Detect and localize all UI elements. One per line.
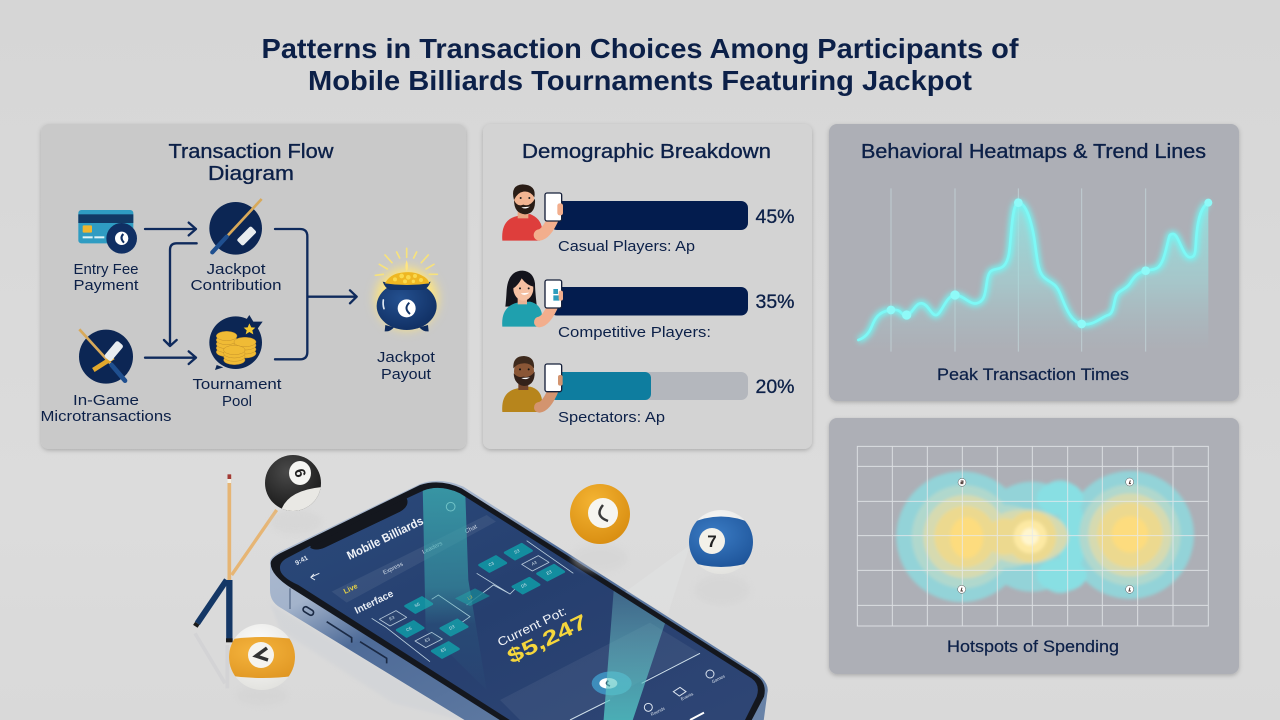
label: jackpot contribution [190,262,282,294]
icon: in-game microtransactions cue [79,329,133,384]
phone body [270,481,768,720]
phone reflection [270,603,473,720]
icon: tournament pool coins [209,315,263,370]
bottom controls: Games [711,674,726,684]
status and header text [294,502,479,617]
label: jackpot payout: Jackpot [377,350,435,366]
status and header text: Express [382,562,404,576]
illustration: black eight-style ball: 6 [290,467,309,479]
illustration: striped orange ball [229,624,295,690]
illustration: blue seven ball [689,510,753,574]
label: in-game microtransactions: Microtransactions [40,409,172,425]
illustration: blue seven ball: 7 [707,532,717,551]
heatmap: hotspots of spending [857,446,1208,626]
camera notch [310,498,407,549]
status and header text: Interface [353,588,396,617]
arrow: entry fee to jackpot contribution [145,223,196,235]
side buttons [302,606,387,663]
label: jackpot contribution: Jackpot [206,262,266,278]
bar: spectators 20%: 20% [756,377,795,398]
tournament brackets: A3 [531,559,538,567]
panel: hotspots of spending heatmap [829,418,1239,674]
label: entry fee payment: Entry Fee [74,262,138,278]
heading: behavioral heatmaps and trend lines: Behavioral Heatmaps & Trend Lines [861,141,1206,163]
icon: casual player with phone [502,184,563,241]
tournament brackets: E3 [424,636,431,643]
tournament brackets: D3 [448,624,456,631]
bar: spectators 20% [550,372,795,426]
bottom controls [500,623,726,720]
tournament brackets: D5 [520,582,528,589]
illustration: orange ball [570,484,630,572]
label: tournament pool: Pool [222,394,252,410]
beam glass above phone [625,545,690,614]
label: in-game microtransactions: In-Game [73,393,139,409]
heading: transaction flow: Diagram [208,163,294,185]
label: tournament pool: Tournament [192,377,282,393]
icon: pot of gold [375,248,437,331]
icon: jackpot contribution cue [209,199,262,255]
phone screen [280,488,758,720]
arrow: microtransactions to pool [145,351,196,364]
tournament brackets: C3 [488,560,495,568]
bar: casual players 45% [550,201,795,255]
current pot amount: Current Pot: [495,604,569,649]
illustration: cue sticks [195,474,277,688]
bar: spectators 20%: Spectators: Ap [558,409,665,426]
tournament brackets [372,541,573,662]
title [262,33,1019,96]
tournament brackets: S5 [414,601,421,608]
heading: transaction flow [168,141,334,185]
current pot amount: $5,247 [504,610,591,668]
panel: transaction flow diagram [40,124,466,449]
icon: spectator with phone [502,356,563,412]
label: jackpot payout [377,350,435,383]
bar: competitive players 35% [550,287,795,341]
tournament brackets: E3 [388,614,396,622]
label: jackpot contribution: Contribution [190,278,282,294]
tournament brackets: C5 [405,625,413,633]
label: tournament pool [192,377,282,410]
label: entry fee payment [74,262,138,294]
title: Mobile Billiards Tournaments Featuring Jackpot [308,65,972,96]
line chart: peak transaction times [858,188,1212,352]
bottom controls: Rounds [650,706,666,717]
caption: peak transaction times: Peak Transaction Times [937,365,1129,384]
status and header text: Leaders [422,541,444,556]
tournament brackets: E3 [546,569,553,576]
arrow: contribution down to pool [164,243,197,346]
status and header text: Live [342,581,359,596]
phone bezel [271,482,765,720]
bottom controls: Events [680,691,694,702]
title: Patterns in Transaction Choices Among Participants of [262,33,1019,64]
bar: competitive players 35%: 35% [756,292,795,313]
bar: casual players 45%: 45% [756,207,795,228]
panel: demographic breakdown [483,124,812,449]
illustration: black eight-style ball [265,455,321,524]
light beam right [603,587,668,720]
heading: demographic breakdown: Demographic Breakdown [522,141,771,163]
caption: hotspots of spending: Hotspots of Spending [947,637,1119,656]
status and header text: Mobile Billiards [345,513,426,563]
current pot amount [498,608,583,662]
icon: competitive player with phone [502,271,563,327]
icon: credit card with coin [78,210,137,254]
bar: casual players 45%: Casual Players: Ap [558,238,695,255]
tournament brackets: S3 [513,548,521,555]
label: in-game microtransactions [40,393,172,425]
tournament brackets: L3 [467,594,474,601]
status and header text: Chat [464,524,479,535]
heading: transaction flow: Transaction Flow [168,141,334,163]
bar: competitive players 35%: Competitive Players: [558,324,711,341]
illustration: smartphone with tournament app [260,470,780,720]
tab bar [332,515,496,603]
panel: peak transaction times trend line [829,124,1239,401]
light beam left [422,488,478,644]
label: jackpot payout: Payout [381,367,431,383]
status and header text: 9:41 [294,555,310,567]
label: entry fee payment: Payment [74,278,138,294]
arrow: merge to jackpot payout [275,229,357,359]
tournament brackets: E5 [440,646,447,653]
